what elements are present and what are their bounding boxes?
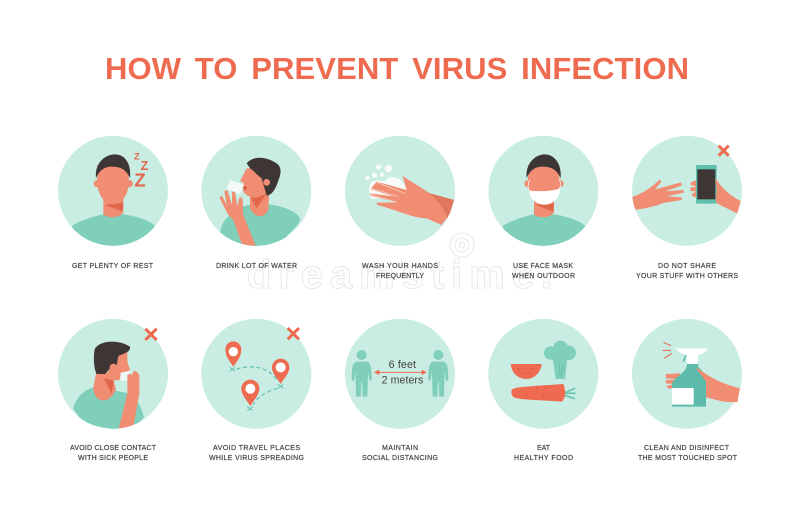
icon: sleeping man: Z bbox=[141, 159, 149, 173]
label bbox=[638, 445, 738, 462]
icon: sleeping man: Z bbox=[134, 151, 140, 161]
phone bbox=[696, 165, 717, 204]
label: USE FACE MASK bbox=[513, 263, 573, 270]
icon: hands and phone bbox=[630, 136, 742, 246]
icon: man with mask bbox=[488, 136, 598, 248]
label: WHEN OUTDOOR bbox=[512, 273, 575, 280]
label: AVOID CLOSE CONTACT bbox=[70, 445, 157, 452]
label bbox=[70, 445, 157, 462]
label: FREQUENTLY bbox=[376, 273, 424, 280]
label: GET PLENTY OF REST bbox=[72, 263, 154, 270]
label: THE MOST TOUCHED SPOT bbox=[638, 455, 738, 462]
label: WHILE VIRUS SPREADING bbox=[209, 455, 304, 462]
icon: man drinking bbox=[201, 136, 311, 248]
icon: map pins bbox=[201, 319, 311, 429]
label: WITH SICK PEOPLE bbox=[78, 455, 148, 462]
panel: do not share bbox=[630, 136, 742, 280]
panel: drink lot of water bbox=[201, 136, 311, 270]
panel: eat healthy food bbox=[488, 319, 598, 462]
label: SOCIAL DISTANCING bbox=[362, 455, 438, 462]
label bbox=[514, 445, 573, 462]
label: AVOID TRAVEL PLACES bbox=[213, 445, 300, 452]
icon: two people and distance: 2 meters bbox=[382, 374, 423, 386]
title: HOW TO PREVENT VIRUS INFECTION bbox=[105, 51, 689, 86]
panel: avoid travel places bbox=[201, 319, 311, 462]
panel: get plenty of rest bbox=[58, 136, 168, 270]
label: MAINTAIN bbox=[382, 445, 418, 452]
label bbox=[362, 263, 438, 280]
label bbox=[362, 445, 438, 462]
label: DO NOT SHARE bbox=[658, 263, 716, 270]
icon: vegetables bbox=[488, 319, 598, 429]
label: HEALTHY FOOD bbox=[514, 455, 573, 462]
icon: washing hand bbox=[345, 136, 455, 246]
icon: coughing man bbox=[58, 319, 168, 430]
icon: two people and distance: 6 feet bbox=[389, 359, 416, 371]
icon: sleeping man: Z bbox=[134, 170, 146, 191]
icon: spray bottle bbox=[632, 319, 742, 429]
panel: social distancing bbox=[345, 319, 455, 462]
icon: sleeping man bbox=[58, 136, 168, 248]
panel: wash your hands bbox=[345, 136, 455, 280]
watermark: dreamstime. bbox=[247, 253, 552, 297]
panel: use face mask bbox=[488, 136, 598, 280]
label: CLEAN AND DISINFECT bbox=[644, 445, 730, 452]
label: EAT bbox=[537, 445, 551, 452]
label: DRINK LOT OF WATER bbox=[216, 263, 297, 270]
icon: two people and distance bbox=[345, 319, 455, 429]
label: WASH YOUR HANDS bbox=[362, 263, 438, 270]
label bbox=[209, 445, 304, 462]
watermark bbox=[247, 233, 552, 297]
label bbox=[636, 263, 738, 280]
label: YOUR STUFF WITH OTHERS bbox=[636, 273, 738, 280]
panel: avoid close contact bbox=[58, 319, 168, 462]
panel: clean and disinfect bbox=[632, 319, 742, 462]
label bbox=[512, 263, 575, 280]
